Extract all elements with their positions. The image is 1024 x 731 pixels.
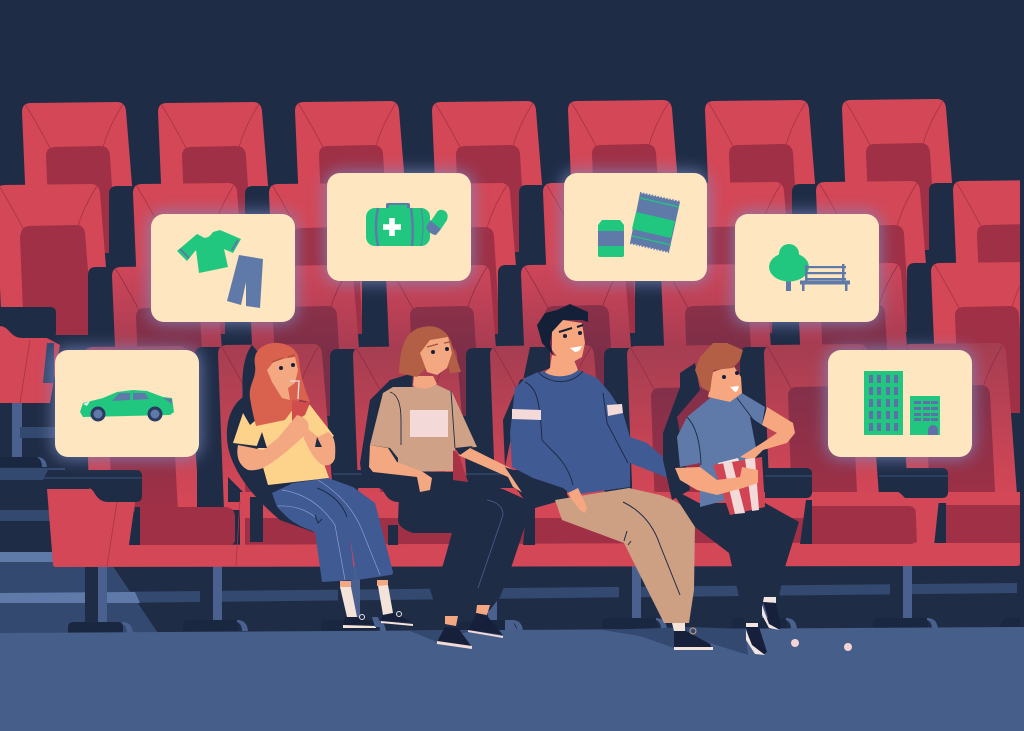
third row of red seats	[88, 262, 1024, 417]
icon: bench	[800, 264, 850, 291]
card: buildings	[826, 348, 974, 459]
card: clothes	[149, 212, 297, 324]
dark seat around man	[503, 347, 578, 545]
icon: car	[80, 390, 174, 422]
card: medical bag	[325, 171, 473, 283]
icon: chip bag	[630, 192, 680, 252]
seat back shadow	[360, 373, 413, 500]
blue t-shirt	[677, 392, 765, 507]
icon: tall building	[864, 371, 903, 435]
person: woman with brown hair	[360, 326, 527, 649]
sleeve bands	[512, 404, 623, 420]
person: boy with popcorn	[663, 343, 799, 655]
face	[267, 355, 298, 400]
tan trousers	[555, 488, 695, 623]
card: park	[733, 212, 881, 324]
seat shadow behind woman	[227, 345, 335, 532]
blue sweater	[510, 370, 673, 495]
icon: tree	[769, 244, 809, 291]
chest patch	[410, 410, 448, 437]
second row of red seats	[0, 180, 1024, 335]
area under the seats	[0, 521, 1024, 633]
person: man in blue sweater	[503, 304, 713, 650]
face and hair	[695, 343, 743, 402]
front row seat backs	[84, 343, 1018, 512]
icon: drink can	[598, 220, 624, 257]
spilled popcorn	[791, 639, 852, 651]
dark gaps at shirt	[256, 432, 322, 448]
neck and face	[399, 326, 461, 389]
seat shadow	[663, 363, 700, 500]
arms	[369, 445, 527, 493]
card: snacks	[562, 171, 709, 283]
card: car	[53, 348, 201, 459]
shoe	[674, 628, 713, 650]
red fabric	[453, 450, 468, 482]
blue striped jeans	[272, 478, 393, 582]
dark trousers	[398, 472, 527, 622]
icon: low building	[910, 396, 940, 435]
back row of red seats	[22, 99, 958, 253]
black shoes	[343, 612, 413, 628]
right edge shade	[1020, 0, 1024, 627]
front row bench and cushions	[47, 489, 1020, 567]
black shoes	[437, 613, 517, 649]
taupe shirt	[370, 383, 477, 472]
raised arm	[740, 407, 795, 460]
icon: first aid bag	[366, 203, 430, 246]
popcorn bucket	[713, 457, 765, 515]
shoes	[746, 597, 781, 655]
hands	[568, 468, 687, 513]
floor	[0, 627, 1024, 731]
forearm and hand	[675, 467, 758, 495]
left edge seat and armrest	[0, 307, 90, 521]
icon: pill	[426, 210, 448, 235]
arms	[237, 415, 335, 470]
armrests	[43, 468, 948, 502]
sock	[672, 623, 685, 631]
socks and ankles	[340, 580, 393, 617]
sleeve gap	[455, 446, 473, 455]
icon: trousers	[227, 255, 263, 308]
seat legs	[68, 563, 1024, 633]
neck and face	[537, 304, 588, 376]
icon: t-shirt	[177, 230, 241, 273]
ankles	[445, 605, 490, 626]
person: woman with red hair drinking	[227, 343, 413, 628]
red hair	[250, 343, 310, 426]
yellow shirt	[233, 398, 334, 485]
drink cup and straw	[290, 381, 310, 423]
dark trousers	[669, 487, 799, 623]
